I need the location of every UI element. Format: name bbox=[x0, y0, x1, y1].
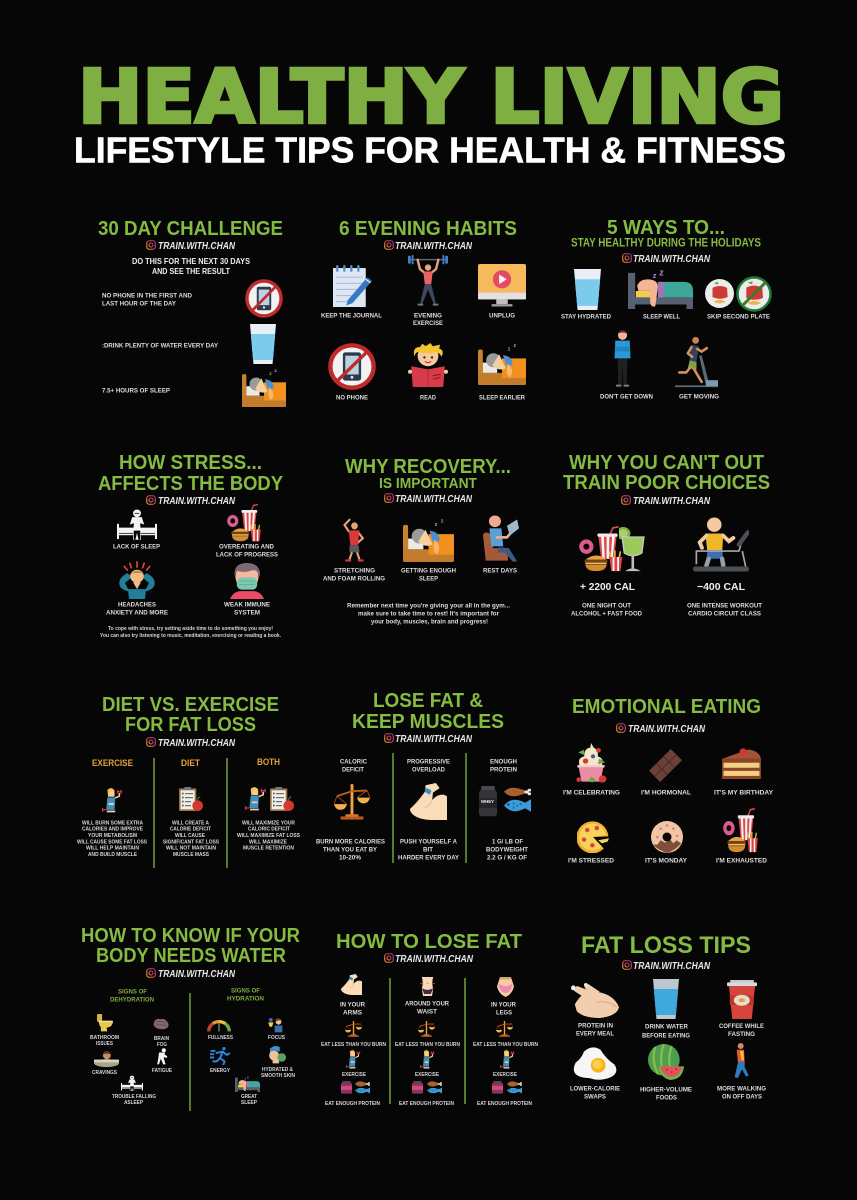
column: enough protein: 2.2 G / KG OF bbox=[487, 854, 527, 862]
tip: get moving: GET MOVING bbox=[679, 394, 719, 400]
effect: headaches: ANXIETY AND MORE bbox=[106, 610, 169, 616]
caption: workout bbox=[687, 602, 762, 618]
column: waist: EAT ENOUGH PROTEIN bbox=[399, 1101, 454, 1107]
item: exhausted: I'M EXHAUSTED bbox=[716, 858, 767, 864]
habit: keep the journal bbox=[321, 265, 382, 320]
item: getting enough sleep: SLEEP bbox=[419, 576, 439, 582]
instagram handle: TRAIN.WITH.CHAN bbox=[158, 495, 235, 507]
effect: headaches bbox=[106, 562, 169, 616]
effect: weak immune system bbox=[224, 563, 271, 616]
habit: evening exercise bbox=[408, 255, 448, 327]
intro text bbox=[132, 257, 251, 276]
sign: cravings bbox=[92, 1051, 119, 1076]
column: both: MUSCLE RETENTION bbox=[243, 846, 294, 852]
column: legs: EXERCISE bbox=[493, 1072, 517, 1078]
tip: more walking: MORE WALKING bbox=[717, 1086, 766, 1092]
tip: higher-volume foods: FOODS bbox=[656, 1094, 678, 1102]
tip: lower-calorie swaps: LOWER-CALORIE bbox=[570, 1086, 621, 1092]
habit: no phone: NO PHONE bbox=[336, 394, 369, 402]
column: caloric deficit: THAN YOU EAT BY bbox=[323, 846, 378, 854]
instagram handle: TRAIN.WITH.CHAN bbox=[395, 953, 473, 965]
sign: trouble falling asleep: TROUBLE FALLING bbox=[112, 1094, 156, 1100]
caption: night out: ONE NIGHT OUT bbox=[582, 602, 631, 610]
tip: stay hydrated: STAY HYDRATED bbox=[561, 314, 611, 320]
heading: DIET VS. EXERCISE bbox=[102, 693, 279, 716]
habit: read: READ bbox=[420, 394, 436, 402]
effect: lack of sleep bbox=[113, 510, 161, 550]
item: rest days bbox=[483, 515, 519, 574]
column: exercise: CALORIES AND IMPROVE bbox=[82, 827, 143, 833]
text: no phone bbox=[102, 292, 192, 308]
effect: overeating: OVEREATING AND bbox=[219, 544, 274, 550]
item: monday: IT'S MONDAY bbox=[645, 858, 688, 864]
tip: lower-calorie swaps bbox=[570, 1047, 621, 1100]
instagram handle: TRAIN.WITH.CHAN bbox=[633, 495, 710, 507]
item: getting enough sleep: GETTING ENOUGH bbox=[401, 568, 456, 574]
sign: energy bbox=[210, 1047, 230, 1074]
column: diet: WILL CREATE A bbox=[172, 820, 209, 826]
tip: more walking bbox=[717, 1043, 766, 1100]
footnote: You can also try listening to music, meditation, exercising or reading a book. bbox=[100, 633, 281, 639]
column: legs: EAT LESS THAN YOU BURN bbox=[473, 1042, 538, 1048]
column: caloric deficit bbox=[316, 758, 386, 862]
column: progressive overload: OVERLOAD bbox=[412, 766, 445, 774]
column: progressive overload: PROGRESSIVE bbox=[407, 758, 451, 766]
column: progressive overload bbox=[398, 758, 460, 862]
heading bbox=[571, 216, 761, 250]
item: stretching bbox=[323, 520, 385, 582]
heading bbox=[81, 924, 300, 967]
panel: fat loss tips bbox=[570, 932, 766, 1102]
panel: lose fat and keep muscles bbox=[316, 689, 531, 863]
instagram handle: TRAIN.WITH.CHAN bbox=[633, 960, 710, 972]
closing note: make sure to take time to rest! It's important for bbox=[358, 610, 499, 618]
habit: unplug: UNPLUG bbox=[489, 312, 515, 320]
panel: emotional eating bbox=[563, 695, 774, 864]
column: exercise: AND BUILD MUSCLE bbox=[88, 852, 137, 858]
icon: sleeping person bbox=[242, 369, 286, 407]
subheading: hydration bbox=[227, 988, 264, 1002]
tip: don't get down bbox=[600, 331, 653, 400]
column: both: BOTH bbox=[257, 757, 280, 768]
heading bbox=[98, 451, 283, 495]
sign: fatigue bbox=[152, 1048, 172, 1074]
icon: water glass bbox=[250, 324, 276, 364]
heading: BODY NEEDS WATER bbox=[96, 944, 286, 967]
column: arms: EXERCISE bbox=[342, 1072, 366, 1078]
effect: weak immune system: SYSTEM bbox=[234, 610, 260, 616]
heading bbox=[563, 451, 770, 494]
column: enough protein: PROTEIN bbox=[490, 766, 517, 774]
habit: keep the journal: KEEP THE JOURNAL bbox=[321, 312, 382, 320]
heading bbox=[345, 455, 511, 492]
habit: no phone bbox=[330, 345, 374, 402]
heading: IS IMPORTANT bbox=[379, 476, 477, 492]
panel: 6 evening habits bbox=[321, 217, 526, 402]
effect: weak immune system: WEAK IMMUNE bbox=[224, 602, 271, 608]
sign: brain fog: FOG bbox=[157, 1042, 167, 1048]
instagram handle: TRAIN.WITH.CHAN bbox=[633, 253, 710, 265]
tip: coffee while fasting: FASTING bbox=[728, 1031, 755, 1038]
column: arms: EAT ENOUGH PROTEIN bbox=[325, 1101, 380, 1107]
heading: FOR FAT LOSS bbox=[125, 713, 256, 736]
heading: HOW STRESS... bbox=[119, 451, 262, 474]
text: sleep: 7.5+ HOURS OF SLEEP bbox=[102, 388, 171, 394]
habit: evening exercise: EVENING bbox=[414, 312, 442, 320]
column: enough protein: 1 G/ LB OF bbox=[492, 838, 523, 846]
item: stretching: AND FOAM ROLLING bbox=[323, 576, 385, 582]
column: diet: CALORIE DEFICIT bbox=[170, 827, 212, 833]
caption: night out bbox=[571, 602, 642, 618]
sign: fatigue: FATIGUE bbox=[152, 1068, 172, 1074]
column: both bbox=[237, 757, 300, 852]
heading: EMOTIONAL EATING bbox=[572, 695, 761, 718]
column: arms: EAT LESS THAN YOU BURN bbox=[321, 1042, 386, 1048]
instagram handle: TRAIN.WITH.CHAN bbox=[158, 240, 235, 252]
sign: focus: FOCUS bbox=[268, 1035, 285, 1041]
panel: how to lose fat bbox=[321, 930, 538, 1107]
sign: focus bbox=[268, 1018, 285, 1041]
tip: drink water before eating bbox=[642, 979, 690, 1040]
item: stretching: STRETCHING bbox=[334, 568, 375, 574]
sign: energy: ENERGY bbox=[210, 1068, 230, 1074]
column: diet: WILL NOT MAINTAIN bbox=[166, 846, 216, 852]
habit: sleep earlier: SLEEP EARLIER bbox=[479, 394, 525, 402]
heading: WHY RECOVERY... bbox=[345, 455, 511, 478]
item: celebrating: I'M CELEBRATING bbox=[563, 790, 620, 796]
column: diet: DIET bbox=[181, 758, 200, 769]
icon: fast food and cocktail bbox=[581, 527, 644, 571]
item: birthday bbox=[714, 748, 774, 796]
tip: higher-volume foods bbox=[640, 1044, 693, 1102]
habit: evening exercise: EXERCISE bbox=[413, 320, 444, 327]
tip: protein in every meal bbox=[571, 983, 619, 1038]
column: legs: EAT ENOUGH PROTEIN bbox=[477, 1101, 532, 1107]
column: arms: ARMS bbox=[343, 1010, 363, 1016]
closing note: your body, muscles, brain and progress! bbox=[371, 618, 488, 626]
tip: drink water before eating: DRINK WATER bbox=[645, 1024, 688, 1030]
instagram handle: TRAIN.WITH.CHAN bbox=[158, 968, 235, 980]
item: stressed bbox=[568, 821, 614, 864]
item: monday bbox=[645, 821, 688, 864]
sign: bathroom issues: BATHROOM bbox=[90, 1035, 119, 1041]
column: enough protein bbox=[479, 758, 531, 862]
tip: protein in every meal: PROTEIN IN bbox=[578, 1022, 613, 1030]
column: both: CALORIC DEFICIT bbox=[248, 827, 291, 833]
item: rest days: REST DAYS bbox=[483, 568, 518, 574]
item: hormonal: I'M HORMONAL bbox=[641, 790, 691, 796]
column: exercise: EXERCISE bbox=[92, 758, 133, 769]
column: both: WILL MAXIMIZE bbox=[249, 839, 287, 845]
column: caloric deficit: DEFICIT bbox=[342, 766, 364, 774]
heading: TRAIN POOR CHOICES bbox=[563, 471, 770, 494]
tip: skip second plate: SKIP SECOND PLATE bbox=[707, 314, 771, 320]
habit: sleep earlier bbox=[478, 343, 526, 402]
item: exhausted bbox=[716, 809, 767, 864]
panel: 5 ways bbox=[561, 216, 771, 400]
panel: 30 day challenge bbox=[98, 217, 286, 407]
item: birthday: IT'S MY BIRTHDAY bbox=[714, 790, 774, 796]
instagram handle: TRAIN.WITH.CHAN bbox=[395, 240, 472, 252]
heading: 30 DAY CHALLENGE bbox=[98, 217, 283, 240]
sign: great sleep bbox=[235, 1076, 260, 1106]
column: progressive overload: BIT bbox=[423, 846, 433, 854]
intro text: DO THIS FOR THE NEXT 30 DAYS bbox=[132, 257, 251, 266]
heading: FAT LOSS TIPS bbox=[581, 932, 751, 959]
tip: skip second plate bbox=[705, 278, 771, 320]
panel: diet vs exercise bbox=[77, 693, 300, 868]
tip: stay hydrated bbox=[561, 269, 611, 320]
sign: brain fog bbox=[154, 1019, 169, 1048]
effect: headaches: HEADACHES bbox=[118, 602, 157, 608]
column: caloric deficit: BURN MORE CALORIES bbox=[316, 838, 386, 846]
caption: night out: ALCOHOL + FAST FOOD bbox=[571, 610, 642, 618]
instagram handle: TRAIN.WITH.CHAN bbox=[628, 723, 705, 735]
tip: protein in every meal: EVERY MEAL bbox=[576, 1030, 614, 1038]
column: diet: WILL CAUSE bbox=[175, 833, 205, 839]
tip: lower-calorie swaps: SWAPS bbox=[584, 1094, 607, 1100]
column: exercise: WILL CAUSE SOME FAT LOSS bbox=[77, 839, 147, 845]
column: enough protein: WHEY bbox=[481, 799, 494, 804]
subheading: dehydration: SIGNS OF bbox=[118, 988, 147, 996]
column: arms: IN YOUR bbox=[340, 1002, 365, 1008]
item: celebrating bbox=[563, 743, 620, 796]
sign: hydrated skin: SMOOTH SKIN bbox=[261, 1073, 295, 1079]
text: no phone: LAST HOUR OF THE DAY bbox=[102, 300, 177, 308]
column: diet bbox=[163, 758, 219, 858]
tip: higher-volume foods: HIGHER-VOLUME bbox=[640, 1086, 693, 1094]
sign: hydrated skin: HYDRATED & bbox=[262, 1067, 293, 1073]
main title: HEALTHY LIVING bbox=[78, 54, 784, 140]
tip: coffee while fasting bbox=[719, 980, 765, 1038]
item: hormonal bbox=[641, 749, 691, 796]
heading: HOW TO LOSE FAT bbox=[336, 930, 522, 953]
tip: more walking: ON OFF DAYS bbox=[722, 1094, 763, 1100]
subheading: hydration: HYDRATION bbox=[227, 996, 264, 1002]
calories in: + 2200 CAL bbox=[580, 581, 636, 593]
column: caloric deficit: CALORIC bbox=[340, 758, 367, 766]
instagram handle: TRAIN.WITH.CHAN bbox=[395, 493, 472, 505]
tip: drink water before eating: BEFORE EATING bbox=[642, 1032, 690, 1040]
instagram handle: TRAIN.WITH.CHAN bbox=[395, 733, 472, 745]
tip: don't get down: DON'T GET DOWN bbox=[600, 394, 653, 400]
column: exercise: YOUR METABOLISM bbox=[88, 833, 137, 839]
panel: why recovery is important bbox=[323, 455, 519, 626]
column: diet: SIGNIFICANT FAT LOSS bbox=[163, 839, 219, 845]
main title: LIFESTYLE TIPS FOR HEALTH & FITNESS bbox=[74, 130, 786, 170]
sign: bathroom issues: ISSUES bbox=[96, 1041, 113, 1047]
effect: overeating bbox=[216, 505, 279, 558]
instagram handle: TRAIN.WITH.CHAN bbox=[158, 737, 235, 749]
column: progressive overload: HARDER EVERY DAY bbox=[398, 854, 460, 862]
heading: 6 EVENING HABITS bbox=[339, 217, 517, 240]
column: diet: MUSCLE MASS bbox=[173, 852, 209, 858]
tip: coffee while fasting: COFFEE WHILE bbox=[719, 1023, 765, 1030]
habit: read bbox=[408, 343, 448, 402]
column: enough protein: ENOUGH bbox=[490, 758, 517, 766]
heading: STAY HEALTHY DURING THE HOLIDAYS bbox=[571, 238, 761, 250]
column: progressive overload: PUSH YOURSELF A bbox=[400, 838, 457, 846]
column: waist: EAT LESS THAN YOU BURN bbox=[395, 1042, 460, 1048]
sign: trouble falling asleep bbox=[112, 1076, 156, 1106]
column: exercise: WILL HELP MAINTAIN bbox=[86, 846, 139, 852]
column: waist: EXERCISE bbox=[415, 1072, 439, 1078]
subheading: dehydration: DEHYDRATION bbox=[110, 996, 154, 1004]
item: stressed: I'M STRESSED bbox=[568, 858, 614, 864]
intro text: AND SEE THE RESULT bbox=[152, 267, 230, 276]
heading: WHY YOU CAN'T OUT bbox=[569, 451, 764, 474]
heading: 5 WAYS TO... bbox=[607, 216, 725, 239]
text: drink water: :DRINK PLENTY OF WATER EVERY DAY bbox=[102, 342, 219, 350]
heading: KEEP MUSCLES bbox=[352, 710, 504, 733]
sign: fullness bbox=[208, 1022, 233, 1041]
column: both: WILL MAXIMIZE FAT LOSS bbox=[237, 833, 300, 839]
closing note: Remember next time you're giving your all in the gym... bbox=[347, 602, 510, 610]
calories out: −400 CAL bbox=[697, 581, 746, 593]
effect: overeating: LACK OF PROGRESS bbox=[216, 552, 279, 558]
heading bbox=[102, 693, 279, 736]
closing note bbox=[347, 602, 510, 626]
panel: why you can't out train poor choices bbox=[563, 451, 770, 618]
sign: bathroom issues bbox=[90, 1014, 119, 1047]
sign: cravings: CRAVINGS bbox=[92, 1070, 117, 1076]
heading: HOW TO KNOW IF YOUR bbox=[81, 924, 300, 947]
icon: no phone bbox=[247, 281, 281, 316]
column: caloric deficit: 10-20% bbox=[339, 854, 361, 862]
footnote: To cope with stress, try setting aside time to do something you enjoy! bbox=[108, 626, 273, 632]
panel: how to know if your body needs water bbox=[81, 924, 300, 1111]
column: exercise: WILL BURN SOME EXTRA bbox=[82, 820, 143, 826]
heading bbox=[352, 689, 504, 733]
icon: treadmill bbox=[693, 518, 749, 571]
sign: brain fog: BRAIN bbox=[154, 1036, 169, 1042]
tip: get moving bbox=[675, 337, 719, 400]
item: getting enough sleep bbox=[401, 518, 456, 582]
column: waist: AROUND YOUR bbox=[405, 1000, 449, 1008]
tip: sleep well bbox=[628, 267, 693, 320]
column: arms bbox=[321, 974, 386, 1107]
text: no phone: NO PHONE IN THE FIRST AND bbox=[102, 292, 192, 300]
column: legs bbox=[473, 977, 538, 1107]
subheading: dehydration bbox=[110, 988, 154, 1004]
heading: AFFECTS THE BODY bbox=[98, 472, 283, 495]
sign: hydrated skin bbox=[261, 1046, 295, 1079]
column: waist: WAIST bbox=[417, 1008, 437, 1016]
caption: workout: CARDIO CIRCUIT CLASS bbox=[688, 610, 762, 618]
heading: LOSE FAT & bbox=[373, 689, 483, 712]
habit: unplug bbox=[478, 264, 526, 320]
footnote bbox=[100, 626, 281, 639]
column: legs: IN YOUR bbox=[491, 1002, 516, 1008]
sign: trouble falling asleep: ASLEEP bbox=[124, 1100, 143, 1106]
sign: great sleep: GREAT bbox=[241, 1094, 258, 1100]
column: waist bbox=[395, 977, 460, 1107]
sign: fullness: FULLNESS bbox=[208, 1035, 233, 1041]
column: enough protein: BODYWEIGHT bbox=[486, 846, 528, 854]
tip: sleep well: SLEEP WELL bbox=[643, 314, 680, 320]
panel: how stress affects the body bbox=[98, 451, 283, 639]
column: both: WILL MAXIMIZE YOUR bbox=[242, 820, 295, 826]
effect: lack of sleep: LACK OF SLEEP bbox=[113, 544, 161, 550]
caption: workout: ONE INTENSE WORKOUT bbox=[687, 602, 762, 610]
subheading: hydration: SIGNS OF bbox=[231, 988, 260, 994]
column: legs: LEGS bbox=[496, 1010, 513, 1016]
column: exercise bbox=[77, 758, 147, 858]
sign: great sleep: SLEEP bbox=[241, 1100, 257, 1106]
